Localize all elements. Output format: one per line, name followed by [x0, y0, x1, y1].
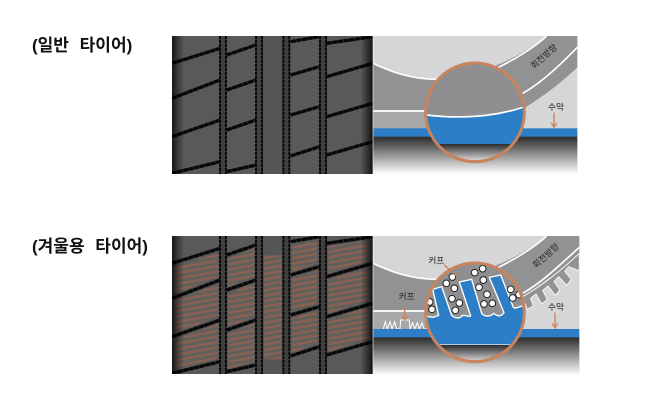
tire band	[373, 236, 579, 313]
sipe patches	[175, 240, 370, 370]
magnified circle	[423, 260, 530, 365]
label: rotation direction: 회전방향	[530, 241, 561, 270]
road surface	[373, 137, 577, 174]
arrow: kerf left	[402, 307, 407, 320]
tread teeth on band	[523, 253, 579, 309]
road surface	[373, 337, 579, 375]
arrow: kerf top	[444, 265, 457, 277]
water film	[373, 128, 577, 137]
magnified circle	[423, 60, 530, 164]
label: water film: 수막	[548, 302, 564, 312]
small tread section	[383, 320, 428, 329]
winter tire tread photo	[172, 236, 373, 374]
label: kerf left: 커프	[399, 291, 415, 301]
regular tire tread photo	[172, 36, 373, 174]
heading: winter tire: (겨울용 타이어)	[32, 237, 148, 256]
arrow: water film	[551, 113, 557, 127]
snow particles	[426, 265, 522, 314]
arrow: water film	[552, 313, 558, 328]
water film	[373, 329, 579, 338]
regular tire hydroplaning diagram	[373, 36, 577, 174]
label: rotation direction: 회전방향	[528, 41, 559, 71]
label: water film: 수막	[548, 102, 564, 112]
label: kerf top: 커프	[428, 255, 444, 265]
illustration canvas	[172, 36, 580, 374]
tire band	[373, 36, 577, 115]
winter tire diagram	[373, 236, 579, 375]
heading: regular tire: (일반 타이어)	[32, 36, 132, 55]
blue tread grooves	[425, 275, 527, 345]
